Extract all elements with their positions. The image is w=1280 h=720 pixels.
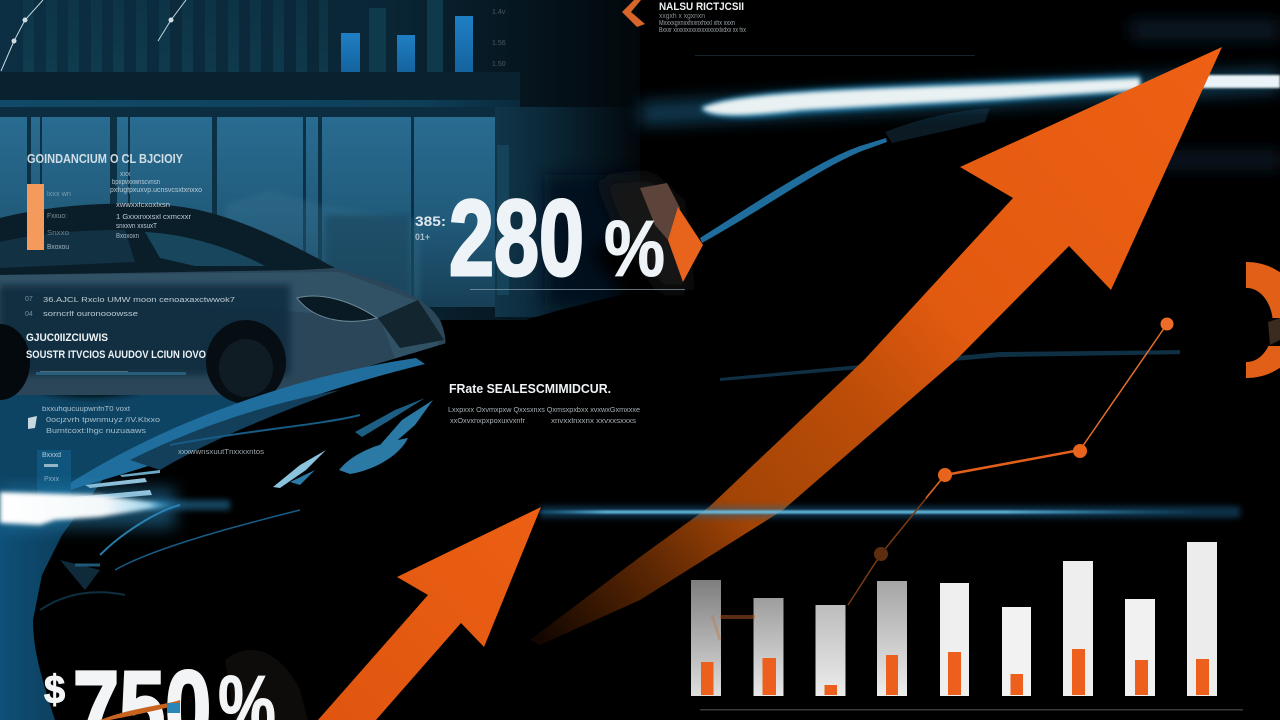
roof spoiler [885, 108, 990, 143]
document icon [28, 416, 37, 429]
front wheel shadow [225, 650, 308, 720]
wheel [206, 320, 286, 404]
body lines: xwwxxfcxoxlxsn [116, 202, 170, 209]
orange legend bar [27, 184, 44, 250]
panel: lower left dark blue [0, 366, 330, 720]
axis labels: 1.56 [492, 40, 506, 47]
text block: mid left: 07 [25, 296, 33, 303]
legend notes [47, 191, 71, 251]
car: showroom sedan [0, 204, 445, 404]
text block: top center: xxgxh x xgxnxn [659, 13, 705, 20]
stat: 280%: 280 [449, 177, 584, 298]
body lines [110, 171, 202, 240]
axis labels: 1.50 [492, 61, 506, 68]
text block: lower left: 0ocjzvrh tpwnmuyz /IV.Klxxo [46, 417, 160, 424]
icon: orange shape beside 280% [600, 175, 703, 290]
text block: upper left heading: GOINDANCIUM O CL BJCIOIY [27, 151, 183, 166]
body lines: Bxoxoxn [116, 233, 139, 240]
panel: small spec card: Pxxx [44, 476, 60, 483]
stat: 750%: $ [44, 668, 65, 712]
light flare: horizontal lens line [540, 506, 1240, 518]
text block: lower left: Burntcoxt:Ihgc nuzuaaws [46, 428, 147, 435]
stat label beside 280% [415, 213, 446, 242]
light flare: left headlight [0, 488, 230, 528]
trend lines [1, 0, 186, 71]
dark text overlay on door [0, 285, 290, 375]
text block: mid left: sorncrlf ouronooowsse [43, 311, 138, 318]
body lines: bpxpvxxwnscvnsn [112, 179, 160, 186]
body lines: snxxvn xxsuxT [116, 223, 158, 230]
sill [36, 372, 186, 375]
panel: small spec card: Bxxxd [42, 452, 61, 459]
legend notes: lxxx wn [47, 191, 71, 198]
text block: top center: Mxxxxgxnxxfxxnxhxxl xhx xxxn [659, 20, 735, 27]
side sill [720, 350, 1190, 381]
light flare: top streak [640, 20, 1280, 170]
headlight streaks [75, 398, 433, 501]
legend notes: Bxoxou [47, 244, 69, 251]
text block: mid left: SOUSTR ITVCIOS AUUDOV LCIUN IOVO [26, 349, 206, 361]
white bars [691, 542, 1217, 696]
text block: center caption: xnvxxlnxxnx xxvxxsxxxs [551, 418, 637, 425]
text block: center caption: Lxxpxxx Oxvmxpxw Qxxsxnxs Qxmsxpxbxx xvxwxGxmxxxe [448, 407, 640, 414]
stat label beside 280%: 01+ [415, 232, 430, 242]
text block: top center [659, 1, 746, 34]
orange bars [701, 649, 1209, 695]
line chart: orange trend [848, 318, 1174, 605]
body lines: 1 Gxxxnxxsxl cxmcxxr [116, 214, 192, 221]
blue bars [341, 16, 473, 72]
body lines: pxfugfpxuxvp.ucnsvcsxtxnxxo [110, 187, 202, 194]
text block: center caption [448, 381, 640, 425]
axis labels [492, 9, 506, 68]
hood highlights [70, 138, 887, 490]
axis [700, 709, 1243, 710]
icon: top chevron [622, 0, 645, 27]
bar chart: top background columns [1, 0, 506, 72]
text block: mid left: 36.AJCL Rxclo UMW moon cenoaxaxctwwok7 [43, 297, 235, 304]
text block: center caption: xxOxvxnxpxpoxuxvxnfr [450, 418, 526, 425]
text block: top center: NALSU RICTJCSII [659, 1, 744, 13]
legend notes: Fxxuo: [47, 213, 67, 220]
body lines: xxx [120, 171, 131, 178]
stat: 750% [44, 660, 276, 720]
divider under 280% [470, 289, 685, 290]
stat: 280%: % [604, 204, 665, 293]
text block: mid left: 04 [25, 311, 33, 318]
text block: top center: Bxxxr xxxxxxxxxxxxxxxxxxlxdxx xx fxx [659, 27, 746, 34]
dark bars [369, 0, 443, 72]
text block: lower left: bxxuhqucuupwnfnT0 voxt [42, 406, 130, 413]
panel: small spec card [37, 450, 71, 502]
text block: mid left: GJUC0IIZCIUWIS [26, 332, 108, 344]
bar chart: white and orange bars [691, 542, 1243, 710]
stat label beside 280%: 385: [415, 213, 446, 229]
panel: showroom backdrop [0, 0, 640, 320]
text block: mid left [25, 296, 235, 361]
window mullions [27, 117, 414, 307]
legend notes: Snxxo [47, 230, 69, 237]
text block: hood caption: xxxwwnsxuutTnxxxxntos [178, 449, 265, 456]
text block: lower left [28, 371, 160, 435]
text block: center caption: FRate SEALESCMIMIDCUR. [449, 381, 611, 396]
axis labels: 1.4v [492, 9, 506, 16]
big arrow [530, 47, 1222, 645]
text block: upper left heading [27, 151, 202, 251]
small arrow [318, 507, 541, 720]
icon: right orange ring [1180, 255, 1280, 385]
